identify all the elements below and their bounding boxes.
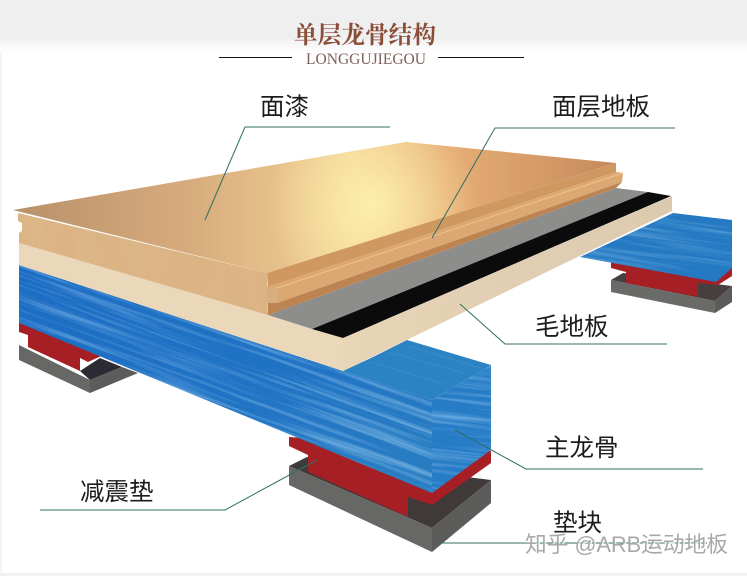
main beam [19,265,491,493]
label: 减震垫: 减震垫 [80,478,154,506]
left pedestal: pad and damper [19,320,138,393]
front pedestal: pad and damper [289,437,491,552]
label: 垫块: 垫块 [553,509,602,537]
grey underlay [268,188,648,329]
top floor board [13,142,623,320]
back pedestal: pad and damper [611,262,732,313]
title: LONGGUJIEGOU [306,51,426,68]
watermark: 知乎 @ARB运动地板 [526,533,729,558]
label: 面漆: 面漆 [260,93,309,121]
watermark: 知乎 @ARB运动地板 [525,532,728,557]
title [219,22,524,68]
title: 单层龙骨结构 [294,22,436,49]
label: 面层地板: 面层地板 [552,93,650,121]
subfloor: cream board [19,196,672,371]
leader lines [40,127,707,543]
label: 主龙骨: 主龙骨 [545,434,618,462]
label: 毛地板: 毛地板 [535,313,608,341]
back beam [580,213,732,282]
black underlay strip [312,192,671,338]
